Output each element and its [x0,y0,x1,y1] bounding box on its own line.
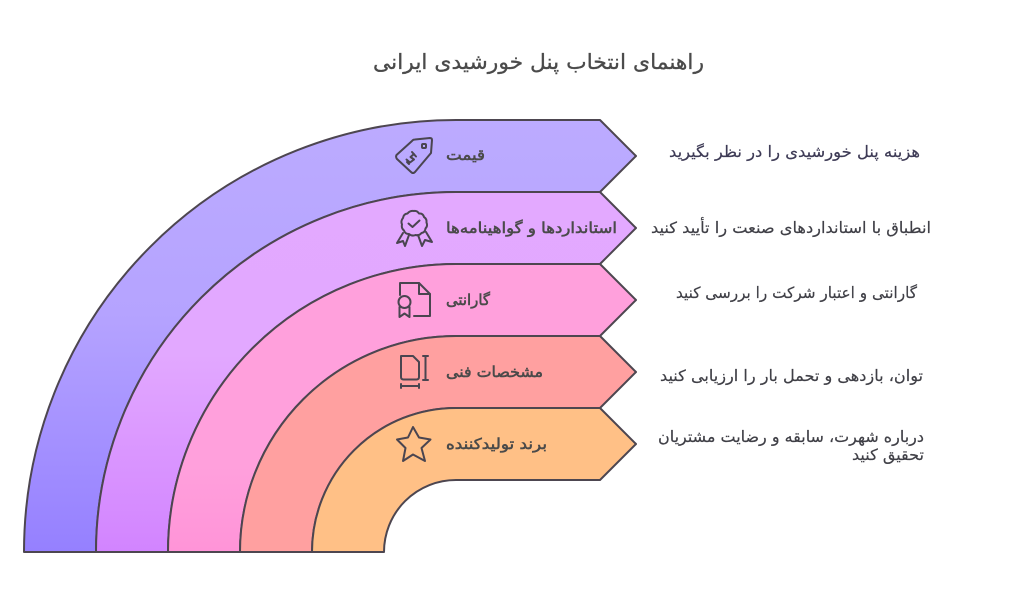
description: brand: درباره شهرت، سابقه و رضایت مشتریان [658,428,924,447]
band: manufacturer brand [312,408,636,552]
icon: warranty document [398,283,430,317]
description: price: هزینه پنل خورشیدی را در نظر بگیرید [669,143,920,162]
title: راهنمای انتخاب پنل خورشیدی ایرانی [373,50,704,74]
description: standards: انطباق با استانداردهای صنعت را تأیید کنید [651,217,931,237]
description: brand [658,428,924,464]
baseline [24,551,384,553]
description: technical specs: توان، بازدهی و تحمل بار را ارزیابی کنید [660,367,923,386]
label: warranty: گارانتی [446,291,491,309]
icon: price tag [396,138,432,173]
description: warranty: گارانتی و اعتبار شرکت را بررسی کنید [676,284,918,303]
icon: technical specification sheet [401,356,428,388]
label: manufacturer brand: برند تولیدکننده [446,435,547,453]
band: technical specifications [240,336,636,552]
description: brand: تحقیق کنید [852,446,924,464]
band: standards and certificates [96,192,636,552]
icon: star [397,427,430,461]
icon: certified badge [397,211,432,246]
label: price: قیمت [446,146,485,164]
label: standards and certificates: استانداردها و گواهینامه‌ها [446,219,617,237]
band: price [24,120,636,552]
band: warranty [168,264,636,552]
label: technical specifications: مشخصات فنی [446,363,543,381]
